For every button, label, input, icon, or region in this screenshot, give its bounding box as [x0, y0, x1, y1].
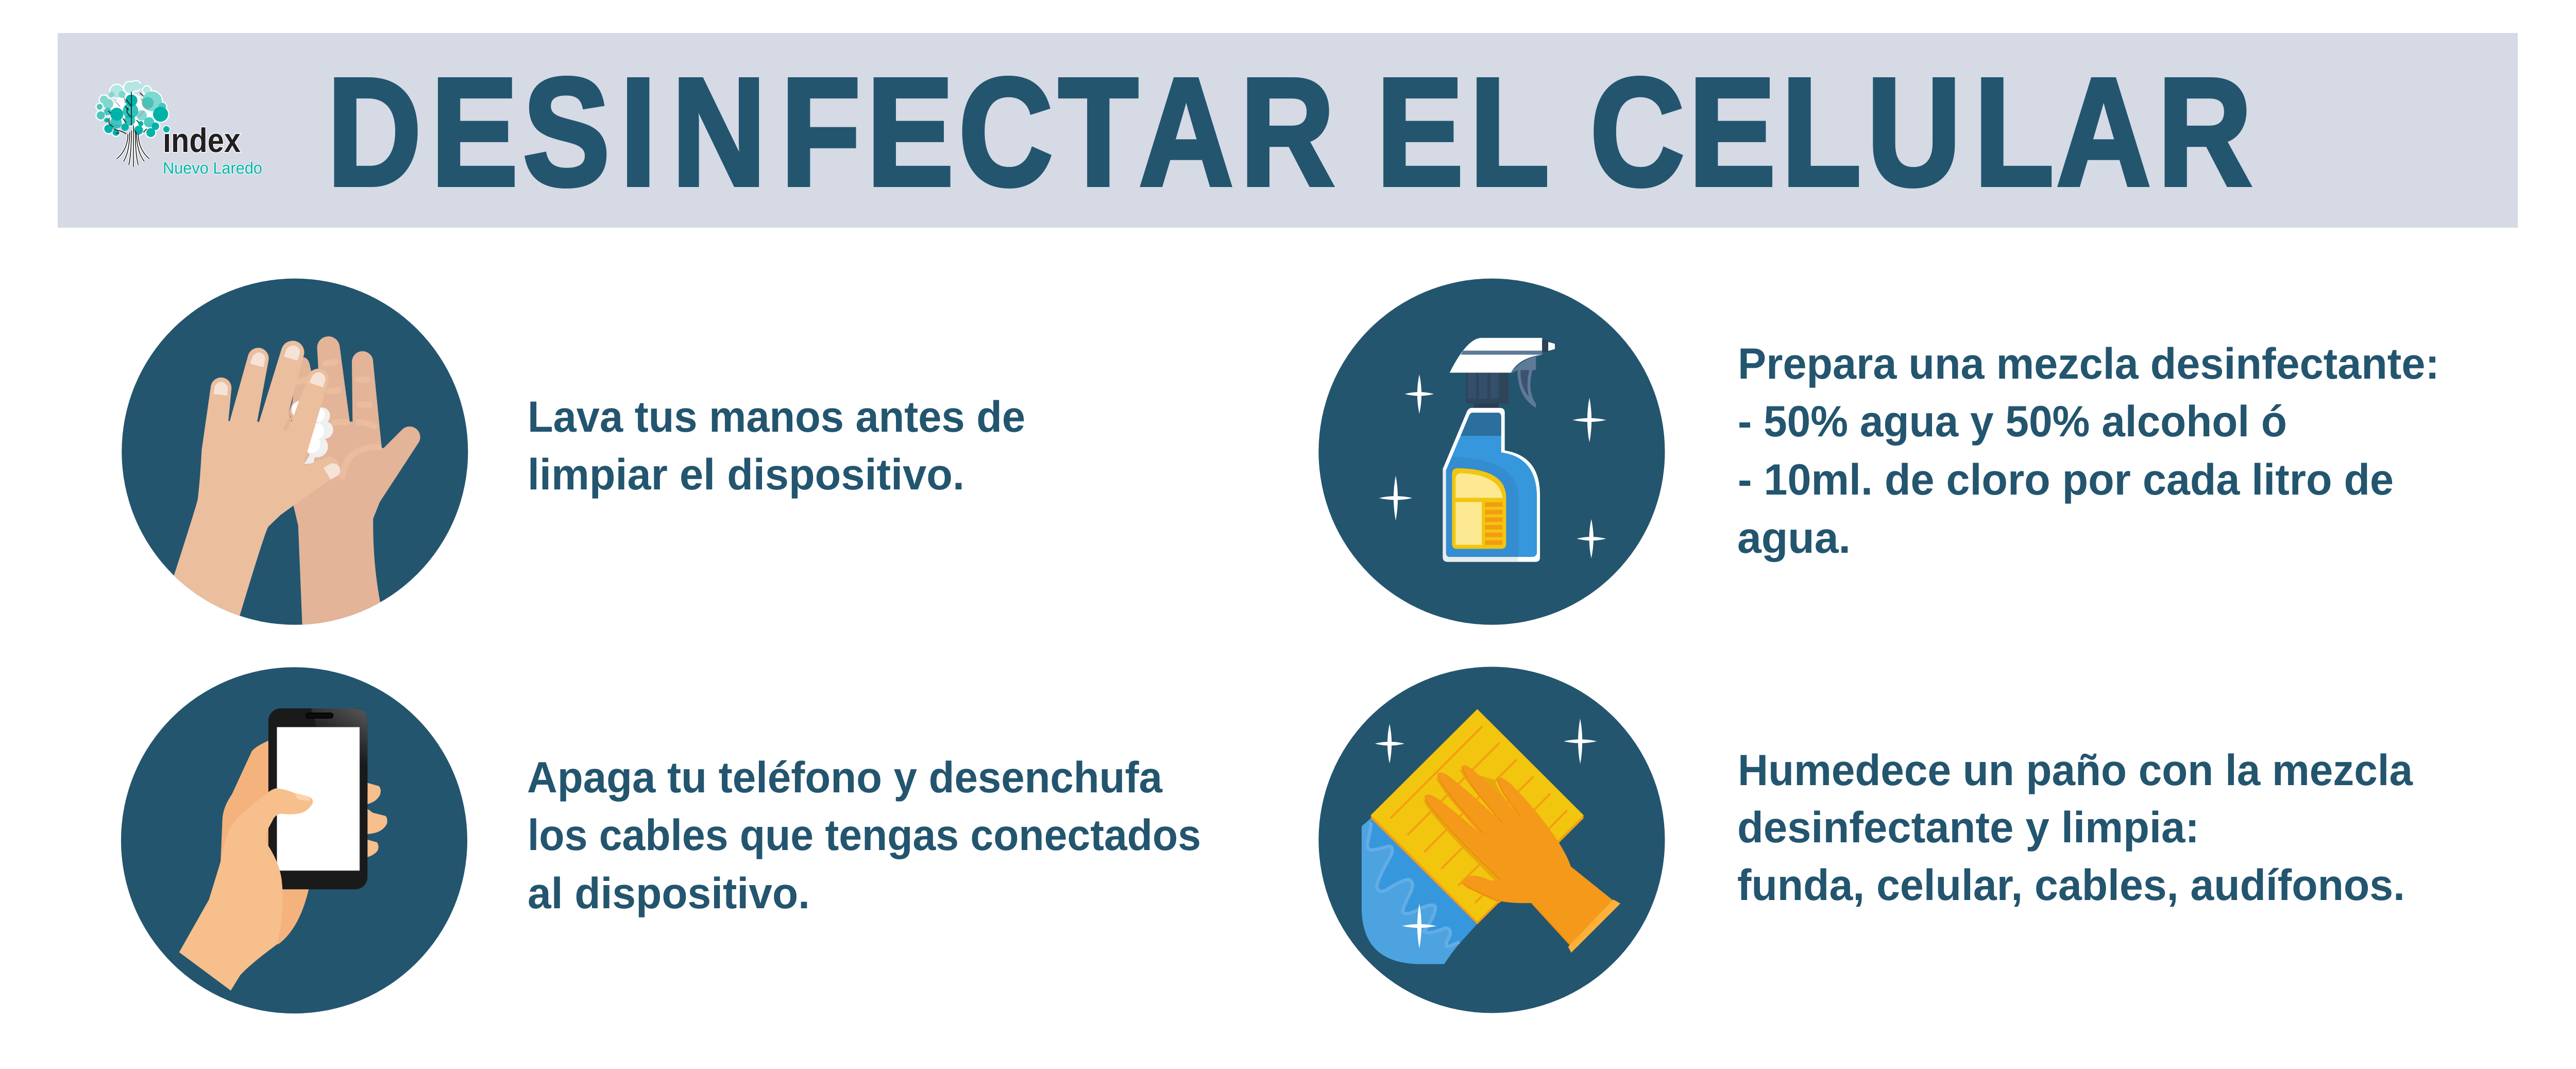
text block: Humedece un paño con la mezcla	[1738, 746, 2413, 795]
header band	[58, 33, 2518, 228]
panel: wipe with cloth	[1318, 667, 2413, 1013]
icon: tree	[97, 81, 168, 167]
icon: gloved hand wiping with cloth	[1318, 667, 1665, 1013]
text block	[1737, 746, 2413, 910]
text block: los cables que tengas conectados	[528, 811, 1201, 860]
panel: wash hands	[122, 279, 1025, 630]
icon: hands being washed	[122, 279, 468, 630]
title: DESINFECTAR EL CELULAR	[327, 46, 2252, 218]
text block: - 50% agua y 50% alcohol ó	[1738, 397, 2287, 446]
text block: desinfectante y limpia:	[1737, 803, 2199, 852]
logo dot	[163, 126, 170, 133]
logo wordmark: index: index	[163, 121, 241, 159]
text block: Lava tus manos antes de	[528, 393, 1025, 442]
panel: turn off phone	[121, 667, 1201, 1013]
text block: - 10ml. de cloro por cada litro de	[1738, 455, 2394, 504]
text block	[527, 753, 1201, 918]
text block: agua.	[1737, 514, 1851, 563]
text block	[1737, 340, 2439, 563]
logo wordmark: Nuevo Laredo: Nuevo Laredo	[163, 159, 262, 177]
text block: Apaga tu teléfono y desenchufa	[527, 753, 1163, 802]
text block	[528, 393, 1025, 499]
logo: index Nuevo Laredo	[97, 81, 262, 177]
text block: al dispositivo.	[528, 869, 810, 918]
icon: hand holding phone	[121, 667, 467, 1013]
text block: funda, celular, cables, audífonos.	[1737, 861, 2405, 910]
text block: Prepara una mezcla desinfectante:	[1738, 340, 2439, 388]
icon: spray bottle	[1318, 279, 1665, 625]
text block: limpiar el dispositivo.	[528, 450, 964, 499]
panel: disinfectant mix	[1318, 279, 2439, 625]
